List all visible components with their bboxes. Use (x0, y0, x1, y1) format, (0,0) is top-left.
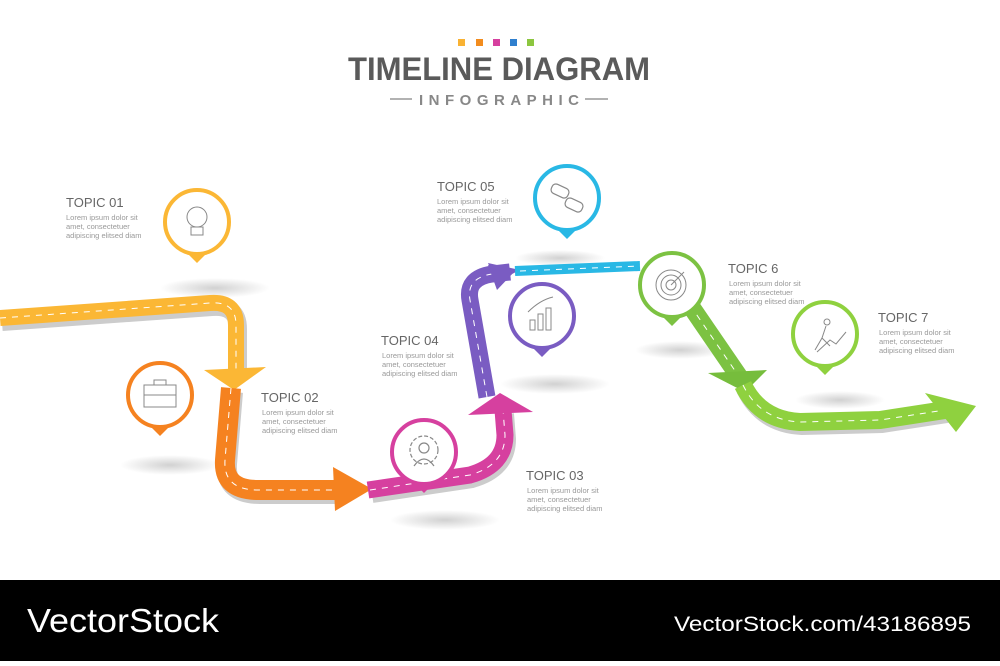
text: topic 03: adipiscing elitsed diam (527, 504, 602, 513)
text: topic 02: adipiscing elitsed diam (262, 426, 337, 435)
text: topic 05 (437, 179, 512, 224)
text: topic 05: amet, consectetuer (437, 206, 501, 215)
pin: topic 1 (165, 190, 229, 263)
text: topic 04: adipiscing elitsed diam (382, 369, 457, 378)
text: topic 03: amet, consectetuer (527, 495, 591, 504)
text: topic 01: TOPIC 01 (66, 195, 124, 210)
text: topic 6: amet, consectetuer (729, 288, 793, 297)
text: topic 6 (728, 261, 804, 306)
text: topic 04: TOPIC 04 (381, 333, 439, 348)
shadows (120, 250, 885, 530)
text: topic 01 (66, 195, 141, 240)
text: topic 02 (261, 390, 337, 435)
orange (227, 392, 337, 494)
text: topic 7 (878, 310, 954, 355)
footer bar: VectorStock.com/43186895 (674, 613, 971, 636)
text: topic 02: Lorem ipsum dolor sit (262, 408, 335, 417)
text: topic 6: Lorem ipsum dolor sit (729, 279, 802, 288)
text: topic 05: Lorem ipsum dolor sit (437, 197, 510, 206)
pin: topic 6 (640, 253, 704, 326)
text: topic 7: Lorem ipsum dolor sit (879, 328, 952, 337)
pin: topic 7 (793, 302, 857, 375)
title: TIMELINE DIAGRAM (348, 51, 650, 87)
text: topic 05: TOPIC 05 (437, 179, 495, 194)
text: topic 03: TOPIC 03 (526, 468, 584, 483)
text: topic 01: Lorem ipsum dolor sit (66, 213, 139, 222)
text: topic 04: Lorem ipsum dolor sit (382, 351, 455, 360)
text: topic 7: adipiscing elitsed diam (879, 346, 954, 355)
text: topic 04 (381, 333, 457, 378)
text: topic 6: TOPIC 6 (728, 261, 778, 276)
subtitle: INFOGRAPHIC (419, 92, 579, 109)
text: topic 7: TOPIC 7 (878, 310, 928, 325)
text: topic 7: amet, consectetuer (879, 337, 943, 346)
green (690, 305, 740, 378)
text: topic 03 (526, 468, 602, 513)
text: topic 6: adipiscing elitsed diam (729, 297, 804, 306)
text: topic 02: TOPIC 02 (261, 390, 319, 405)
footer bar: VectorStock (27, 602, 220, 639)
header dots (458, 39, 534, 46)
road (0, 263, 976, 511)
pin: topic 2 (128, 363, 192, 436)
text: topic 04: amet, consectetuer (382, 360, 446, 369)
text: topic 05: adipiscing elitsed diam (437, 215, 512, 224)
pin: topic 5 (535, 166, 599, 239)
text: topic 02: amet, consectetuer (262, 417, 326, 426)
footer bar (0, 580, 1000, 661)
pin: topic 4 (510, 284, 574, 357)
yellow (2, 307, 238, 376)
purple (469, 272, 510, 397)
magenta (372, 414, 507, 494)
text: topic 01: adipiscing elitsed diam (66, 231, 141, 240)
pin: topic 3 (392, 420, 456, 493)
text: topic 03: Lorem ipsum dolor sit (527, 486, 600, 495)
blue (515, 266, 640, 271)
text: topic 01: amet, consectetuer (66, 222, 130, 231)
